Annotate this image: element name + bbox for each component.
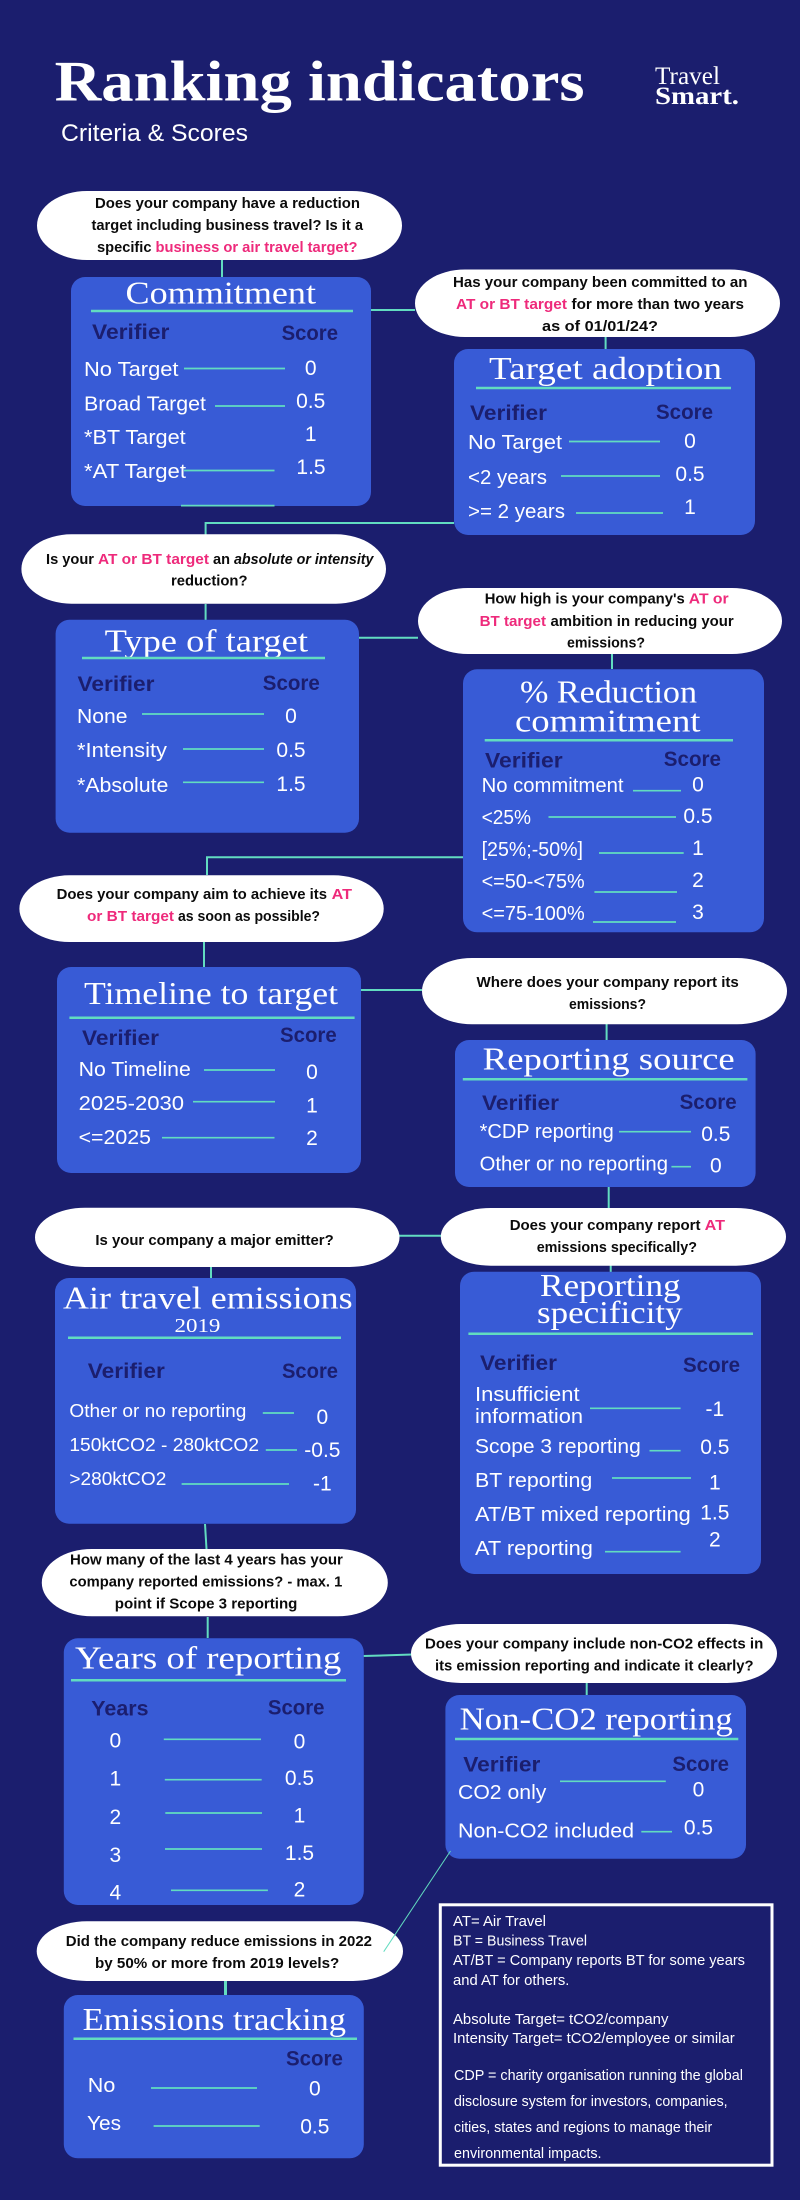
- row: BT reporting: 1: [709, 1472, 721, 1495]
- legend: CDP definition: cities, states and regions to manage their: [454, 2119, 712, 2136]
- heading: Reporting specificity: [537, 1267, 683, 1330]
- question: ambition: AT or: [689, 591, 729, 608]
- question: AT emissions specifically: Does your company report: [510, 1217, 700, 1234]
- row: 2025-2030: 1: [306, 1095, 318, 1118]
- row: No Timeline: No Timeline: [79, 1059, 191, 1081]
- row: Other or no reporting: Other or no reporting: [69, 1401, 246, 1421]
- panel: Years of reporting: [64, 1638, 364, 1905]
- row: over 280 ktCO2: -1: [313, 1473, 332, 1496]
- row: under 2 years: <2 years: [468, 467, 547, 489]
- row: Other or no reporting: Other or no reporting: [480, 1154, 668, 1176]
- heading: % Reduction commitment: [515, 674, 701, 739]
- heading: Air travel emissions 2019: [63, 1279, 353, 1337]
- row: AT/BT mixed reporting: AT/BT mixed reporting: [475, 1504, 691, 1526]
- column headers: [482, 1090, 737, 1115]
- row: 2 years or more: [468, 496, 696, 523]
- row: 2 years: 2: [109, 1806, 121, 1829]
- question: where report: emissions?: [569, 996, 646, 1013]
- row: No Target: No Target: [84, 359, 179, 381]
- heading: Timeline to target: Timeline to target: [84, 975, 338, 1011]
- row: No Target: 0: [684, 430, 696, 453]
- column header: Score: Score: [286, 2046, 343, 2070]
- question: absolute or intensity: absolute or intensity: [234, 551, 374, 568]
- row: 50 to 75%: <=50-<75%: [482, 871, 585, 893]
- question: major emitter: Is your company a major emitter?: [95, 1232, 334, 1249]
- row: under 25%: 0.5: [683, 805, 713, 828]
- row: None: 0: [285, 705, 297, 728]
- question: years reported: [42, 1549, 388, 1616]
- heading: Reporting source: Reporting source: [483, 1040, 735, 1076]
- row: BT reporting: BT reporting: [475, 1470, 592, 1492]
- question: reduction target: specific: [97, 239, 152, 256]
- row: No Target: 0: [305, 357, 317, 380]
- column headers: [91, 1695, 325, 1720]
- question: non-CO2 effects: Does your company include non-CO2 effects in: [425, 1636, 763, 1653]
- column headers: Score: [282, 321, 338, 345]
- row: AT reporting: [475, 1529, 721, 1560]
- row: Non-CO2 included: [458, 1817, 713, 1843]
- row: Intensity: 0.5: [276, 739, 306, 762]
- column headers: Verifier: [92, 320, 170, 344]
- question: years reported: company reported emissions? - max. 1: [69, 1574, 342, 1591]
- panel: Reporting specificity: [460, 1267, 761, 1574]
- row: No Target: [468, 430, 696, 454]
- row: AT Target: [84, 456, 326, 483]
- column headers: Verifier: [485, 749, 563, 773]
- row: CDP reporting: [480, 1121, 730, 1146]
- title: Ranking indicators: [55, 51, 585, 114]
- column headers: [463, 1752, 729, 1777]
- legend: CDP definition: environmental impacts.: [454, 2145, 602, 2162]
- question: commitment duration: [415, 270, 780, 337]
- question: AT emissions specifically: AT: [705, 1217, 725, 1234]
- row: 150-280 ktCO2: [69, 1435, 340, 1462]
- question: as soon as possible: AT: [332, 886, 352, 903]
- question: where report: Where does your company report its: [476, 974, 739, 991]
- question: reduction target: [37, 191, 402, 260]
- row: Scope 3 reporting: Scope 3 reporting: [475, 1436, 641, 1458]
- question: major emitter: [35, 1208, 400, 1267]
- heading: Non-CO2 reporting: Non-CO2 reporting: [460, 1700, 733, 1736]
- row: Yes: [87, 2113, 329, 2138]
- row: BT Target: 1: [305, 423, 317, 446]
- question: ambition: ambition in reducing your: [550, 613, 734, 630]
- panel: Target adoption: [454, 349, 755, 535]
- row: under 25%: [482, 805, 713, 829]
- row: over 280 ktCO2: [69, 1469, 332, 1496]
- heading: Reporting specificity: specificity: [537, 1294, 683, 1330]
- question: reduction target: target including business travel? Is it a: [92, 217, 364, 234]
- row: AT/BT mixed reporting: 1.5: [700, 1502, 729, 1525]
- logo: Travel Smart: [655, 63, 739, 110]
- logo: Travel Smart: Smart.: [655, 83, 739, 110]
- row: 75 to 100%: 3: [692, 901, 704, 924]
- row: No Target: [84, 357, 317, 381]
- row: Absolute: *Absolute: [77, 775, 168, 797]
- row: Insufficient information: information: [475, 1406, 583, 1428]
- question: as soon as possible: Does your company aim to achieve its: [57, 886, 327, 903]
- question: non-CO2 effects: its emission reporting and indicate it clearly?: [435, 1658, 754, 1675]
- panel: Timeline to target: [57, 967, 361, 1173]
- row: CDP reporting: *CDP reporting: [480, 1121, 614, 1143]
- panel: Type of target: [56, 620, 359, 833]
- column headers: Score: [282, 1359, 338, 1383]
- row: Absolute: [77, 773, 306, 797]
- row: CO2 only: CO2 only: [458, 1782, 546, 1804]
- question: 2022 reduction: Did the company reduce emissions in 2022: [66, 1933, 372, 1950]
- row: 1 year: 1: [109, 1768, 121, 1791]
- row: Absolute: 1.5: [276, 773, 306, 796]
- question: ambition: emissions?: [567, 635, 645, 652]
- column headers: Verifier: [463, 1753, 541, 1777]
- row: 25 to 50%: [25%;-50%]: [482, 839, 583, 861]
- subtitle: Criteria & Scores: [61, 120, 248, 147]
- question: absolute or intensity: AT or BT target: [98, 551, 209, 568]
- row: Intensity: *Intensity: [77, 740, 167, 762]
- row: 25 to 50%: [482, 837, 704, 861]
- row: AT Target: *AT Target: [84, 461, 186, 483]
- question: absolute or intensity: [21, 534, 386, 604]
- row: No: 0: [309, 2078, 321, 2101]
- question: absolute or intensity: reduction?: [171, 573, 248, 590]
- row: 3 years: [109, 1842, 314, 1867]
- row: BT reporting: [475, 1470, 721, 1495]
- row: Scope 3 reporting: [475, 1436, 729, 1459]
- question: as soon as possible: as soon as possible?: [178, 908, 320, 925]
- column headers: Verifier: [88, 1359, 165, 1383]
- row: AT Target: 1.5: [296, 456, 326, 479]
- legend: abbreviations: [453, 1913, 745, 1989]
- row: 2 years: [109, 1805, 305, 1829]
- arrow: diagonal connector: [384, 1851, 450, 1952]
- row: 3 years: 1.5: [285, 1842, 314, 1865]
- question: years reported: How many of the last 4 years has your: [70, 1552, 343, 1569]
- question: ambition: How high is your company's: [485, 591, 685, 608]
- legend: abbreviations: AT/BT = Company reports BT for some years: [453, 1952, 745, 1969]
- row: Yes: 0.5: [300, 2115, 329, 2138]
- row: 0 years: [109, 1729, 305, 1753]
- column headers: [485, 747, 721, 773]
- row: 1 year: [109, 1767, 314, 1791]
- column headers: Score: [672, 1752, 729, 1776]
- row: 2025-2030: [79, 1093, 318, 1118]
- column headers: Verifier: [78, 672, 155, 696]
- heading: Air travel emissions 2019: 2019: [174, 1315, 220, 1337]
- panel: Emissions tracking: [64, 1995, 364, 2158]
- row: 50 to 75%: [482, 869, 704, 893]
- panel: Non-CO2 reporting: [445, 1695, 746, 1859]
- column headers: Score: [683, 1353, 740, 1377]
- legend: target types: [453, 2011, 735, 2047]
- row: up to 2025: <=2025: [79, 1127, 151, 1149]
- row: BT Target: *BT Target: [84, 427, 186, 449]
- question: 2022 reduction: by 50% or more from 2019 levels?: [95, 1955, 339, 1972]
- heading: Reporting specificity: Reporting: [540, 1267, 681, 1303]
- row: under 25%: <25%: [482, 807, 531, 829]
- row: 150-280 ktCO2: 150ktCO2 - 280ktCO2: [69, 1435, 259, 1455]
- column headers: Verifier: [82, 1026, 160, 1050]
- row: 0 years: 0: [109, 1729, 121, 1752]
- heading: Emissions tracking: Emissions tracking: [83, 2001, 346, 2037]
- column headers: [88, 1359, 338, 1383]
- row: 75 to 100%: <=75-100%: [482, 903, 585, 925]
- row: Broad Target: 0.5: [296, 390, 325, 413]
- question: as soon as possible: [19, 875, 384, 942]
- question: commitment duration: Has your company been committed to an: [453, 274, 748, 291]
- row: 2 years or more: >= 2 years: [468, 501, 565, 523]
- row: BT Target: [84, 423, 317, 449]
- row: 3 years: 3: [109, 1844, 121, 1867]
- legend: CDP definition: disclosure system for investors, companies,: [454, 2093, 728, 2110]
- column headers: Verifier: [482, 1091, 560, 1115]
- question: reduction target: Does your company have a reduction: [95, 195, 360, 212]
- column headers: Score: [268, 1695, 325, 1719]
- row: No: No: [88, 2075, 115, 2097]
- row: under 2 years: 0.5: [675, 463, 705, 486]
- heading: Commitment: Commitment: [126, 274, 316, 310]
- question: absolute or intensity: an: [213, 551, 230, 568]
- row: 4 years: [109, 1879, 305, 1904]
- column headers: Verifier: [470, 401, 548, 425]
- question: where report: [422, 958, 787, 1024]
- question: ambition: [418, 588, 782, 654]
- column headers: [92, 320, 338, 345]
- row: No commitment: No commitment: [482, 775, 624, 797]
- column headers: Score: [680, 1090, 737, 1114]
- logo: Travel Smart: Travel: [655, 63, 720, 90]
- row: Non-CO2 included: Non-CO2 included: [458, 1821, 634, 1843]
- row: 75 to 100%: [482, 901, 704, 925]
- question: 2022 reduction: [37, 1921, 403, 1981]
- legend: target types: Intensity Target= tCO2/employee or similar: [453, 2030, 735, 2047]
- row: Scope 3 reporting: 0.5: [700, 1436, 729, 1459]
- row: over 280 ktCO2: >280ktCO2: [69, 1469, 166, 1489]
- row: up to 2025: 2: [306, 1127, 318, 1150]
- row: No Target: No Target: [468, 432, 562, 454]
- panel: Commitment: [71, 274, 371, 506]
- row: Yes: Yes: [87, 2113, 121, 2135]
- row: Non-CO2 included: 0.5: [684, 1817, 713, 1840]
- heading: % Reduction commitment: commitment: [515, 703, 701, 739]
- column headers: [82, 1023, 337, 1050]
- row: 2 years or more: 1: [684, 496, 696, 519]
- row: under 2 years: [468, 463, 705, 489]
- row: No commitment: 0: [692, 774, 704, 797]
- question: AT emissions specifically: [441, 1208, 786, 1266]
- row: Other or no reporting: 0: [317, 1406, 328, 1429]
- row: None: [77, 705, 297, 728]
- column headers: [470, 400, 713, 425]
- row: Insufficient information: -1: [705, 1398, 724, 1421]
- row: No Timeline: 0: [306, 1061, 318, 1084]
- heading: Target adoption: Target adoption: [489, 350, 722, 386]
- row: AT reporting: 2: [709, 1529, 721, 1552]
- legend: abbreviations: and AT for others.: [453, 1972, 569, 1989]
- legend: abbreviations: AT= Air Travel: [453, 1913, 546, 1930]
- row: 2 years: 1: [294, 1805, 305, 1828]
- connectors: [204, 260, 612, 1995]
- row: 0 years: 0: [294, 1730, 305, 1753]
- question: AT emissions specifically: emissions specifically?: [537, 1239, 697, 1256]
- row: Other or no reporting: 0: [710, 1155, 722, 1178]
- row: CO2 only: 0: [693, 1779, 704, 1802]
- row: CDP reporting: 0.5: [701, 1123, 730, 1146]
- panel: % Reduction commitment: [463, 669, 764, 932]
- column headers: [78, 671, 320, 696]
- row: AT reporting: AT reporting: [475, 1538, 593, 1560]
- row: None: None: [77, 706, 128, 728]
- question: non-CO2 effects: [411, 1624, 777, 1683]
- legend: CDP definition: CDP = charity organisation running the global: [454, 2067, 743, 2084]
- column headers: Score: [664, 747, 721, 771]
- legend box: [440, 1905, 772, 2165]
- question: commitment duration: AT or BT target: [456, 296, 567, 313]
- row: 25 to 50%: 1: [692, 837, 704, 860]
- question: ambition: BT target: [480, 613, 546, 630]
- heading: Air travel emissions 2019: Air travel emissions: [63, 1279, 353, 1315]
- column headers: Score: [263, 671, 320, 695]
- column headers: Verifier: [480, 1351, 558, 1375]
- question: years reported: point if Scope 3 reporting: [115, 1596, 297, 1613]
- column headers: Years: [91, 1696, 149, 1720]
- question: as soon as possible: or BT target: [87, 908, 174, 925]
- question: commitment duration: as of 01/01/24?: [542, 318, 658, 335]
- heading: Type of target: Type of target: [105, 623, 308, 659]
- column headers: Score: [280, 1023, 337, 1047]
- panel: Reporting source: [455, 1040, 756, 1187]
- row: Insufficient information: Insufficient: [475, 1384, 580, 1406]
- heading: Years of reporting: Years of reporting: [75, 1639, 341, 1675]
- column headers: Score: [656, 400, 713, 424]
- row: Intensity: [77, 739, 306, 762]
- legend: CDP definition: [454, 2067, 743, 2162]
- row: Broad Target: [84, 390, 325, 416]
- heading: % Reduction commitment: % Reduction: [520, 674, 697, 710]
- row: 1 year: 0.5: [285, 1767, 314, 1790]
- panel: Air travel emissions 2019: [55, 1278, 356, 1524]
- row: No: [88, 2075, 321, 2101]
- row: 50 to 75%: 2: [692, 869, 704, 892]
- question: absolute or intensity: Is your: [46, 551, 94, 568]
- column headers: [480, 1351, 740, 1377]
- row: 2025-2030: 2025-2030: [79, 1093, 184, 1115]
- row: No Timeline: [79, 1059, 318, 1084]
- row: CO2 only: [458, 1779, 704, 1804]
- legend: target types: Absolute Target= tCO2/company: [453, 2011, 669, 2028]
- question: reduction target: business or air travel target?: [156, 239, 358, 256]
- row: 4 years: 2: [294, 1879, 305, 1902]
- row: up to 2025: [79, 1127, 318, 1150]
- row: 4 years: 4: [109, 1881, 121, 1904]
- row: Other or no reporting: [69, 1401, 328, 1429]
- row: 150-280 ktCO2: -0.5: [304, 1439, 340, 1462]
- row: Broad Target: Broad Target: [84, 394, 206, 416]
- question: commitment duration: for more than two years: [572, 296, 744, 313]
- row: No commitment: [482, 774, 704, 797]
- row: Insufficient information: [475, 1384, 724, 1428]
- legend: abbreviations: BT = Business Travel: [453, 1932, 587, 1949]
